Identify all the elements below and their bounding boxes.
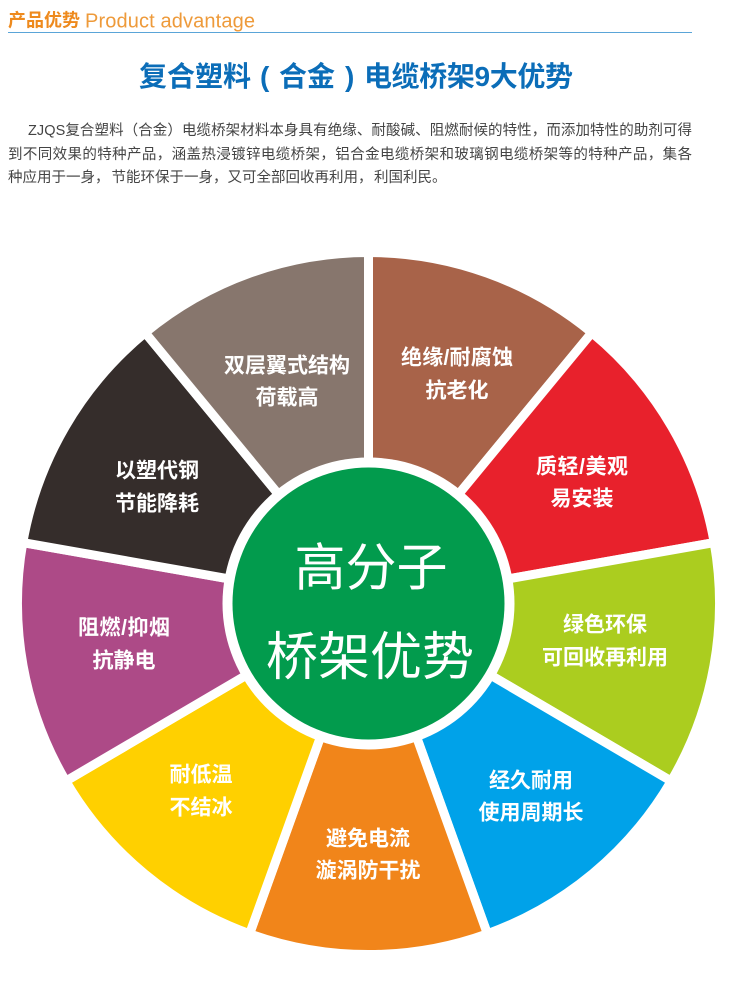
segment: green recycling: 绿色环保 xyxy=(563,614,647,636)
segment: double layer xyxy=(145,252,368,604)
header: product advantage xyxy=(8,10,692,33)
title: ( xyxy=(260,61,270,92)
segment: energy saving: 节能降耗 xyxy=(115,492,199,516)
segment: low temperature xyxy=(66,604,369,934)
segment: insulation: 绝缘/耐腐蚀 xyxy=(401,346,513,370)
segment: energy saving: 以塑代钢 xyxy=(115,460,199,482)
header: product advantage: 产品优势 xyxy=(8,10,80,30)
segment: energy saving xyxy=(23,333,369,604)
segment: light weight xyxy=(368,333,714,604)
intro paragraph: 又可全部回收再利用， xyxy=(228,168,372,186)
intro paragraph: 种应用于一身， xyxy=(8,168,110,186)
segment: durable: 经久耐用 xyxy=(489,770,573,792)
segment: durable: 使用周期长 xyxy=(478,802,584,824)
title: ) xyxy=(345,61,354,92)
segment: double layer: 双层翼式结构 xyxy=(224,354,350,378)
segment: low temperature: 耐低温 xyxy=(170,764,232,786)
segment: double layer: 荷载高 xyxy=(256,386,318,410)
center circle: 桥架优势 xyxy=(266,629,474,687)
header: product advantage: Product advantage xyxy=(85,10,255,32)
intro paragraph: ZJQS复合塑料（合金）电缆桥架材料本身具有绝缘、耐酸碱、阻燃耐候的特性，而添加特性的助剂可得 xyxy=(28,121,692,139)
title: 合金 xyxy=(279,61,335,92)
segment: insulation xyxy=(368,252,592,604)
segment: eddy current: 避免电流 xyxy=(326,828,410,850)
segment: insulation: 抗老化 xyxy=(426,378,488,402)
segment: eddy current: 漩涡防干扰 xyxy=(316,860,420,882)
segment: durable xyxy=(368,604,671,934)
intro paragraph: 到不同效果的特种产品，涵盖热浸镀锌电缆桥架，铝合金电缆桥架和玻璃钢电缆桥架等的特种产品，集各 xyxy=(8,145,692,163)
title: 电缆桥架9大优势 xyxy=(364,61,573,92)
intro paragraph xyxy=(8,121,692,186)
wheel diagram xyxy=(17,252,720,955)
title: 复合塑料 xyxy=(139,61,251,92)
segment: light weight: 质轻/美观 xyxy=(536,456,628,478)
segment: green recycling: 可回收再利用 xyxy=(542,646,668,670)
center circle: 高分子 xyxy=(294,540,448,596)
segment: flame retardant xyxy=(17,543,369,781)
segment: green recycling xyxy=(368,543,720,781)
segment: eddy current xyxy=(250,604,487,955)
intro paragraph: 节能环保于一身， xyxy=(112,169,228,186)
segment: flame retardant: 阻燃/抑烟 xyxy=(78,616,170,640)
segment: low temperature: 不结冰 xyxy=(170,796,232,820)
intro paragraph: 利国利民。 xyxy=(374,169,446,186)
center circle xyxy=(222,458,514,750)
segment: light weight: 易安装 xyxy=(550,488,614,510)
segment: flame retardant: 抗静电 xyxy=(92,648,156,672)
